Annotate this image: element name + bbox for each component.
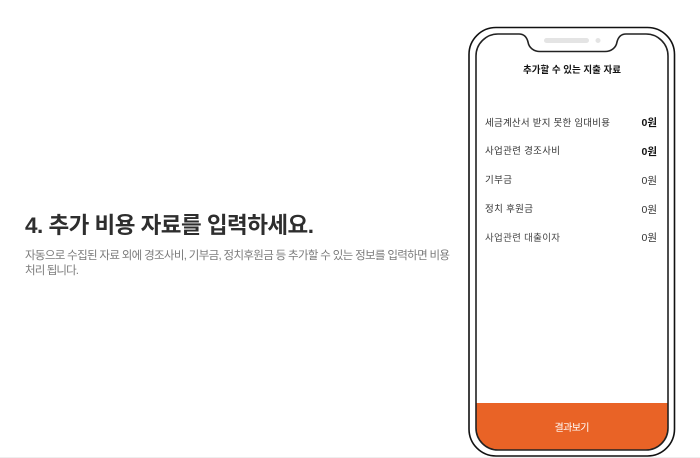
result button	[476, 403, 668, 450]
phone screen outline with notch	[476, 34, 668, 450]
expense row: rent: 0원	[642, 116, 657, 129]
phone mockup	[469, 28, 674, 456]
expense row: political: 0원	[642, 204, 657, 216]
description text: 자동으로 수집된 자료 외에 경조사비, 기부금, 정치후원금 등 추가할 수 있는 정보를 입력하면 비용	[25, 248, 450, 262]
result button: 결과보기	[554, 422, 590, 434]
expense row: donations	[485, 175, 657, 187]
camera	[596, 38, 600, 43]
expense row: congratulations: 0원	[642, 145, 657, 158]
expense row: rent: 세금계산서 받지 못한 임대비용	[485, 117, 610, 129]
description text: 처리 됩니다.	[25, 264, 79, 277]
phone body	[469, 28, 674, 456]
description text	[25, 248, 450, 277]
expense row: political	[485, 203, 657, 216]
expense row: donations: 기부금	[485, 175, 512, 186]
screen title: 추가할 수 있는 지출 자료	[523, 64, 621, 76]
expense row: loan interest: 0원	[642, 232, 657, 244]
heading: 4. 추가 비용 자료를 입력하세요.	[25, 213, 314, 238]
expense row: donations: 0원	[642, 175, 657, 187]
expense row: loan interest	[485, 232, 657, 244]
expense row: congratulations: 사업관련 경조사비	[485, 145, 560, 157]
expense row: loan interest: 사업관련 대출이자	[485, 232, 560, 244]
expense row: rent	[485, 116, 657, 129]
speaker	[544, 38, 589, 43]
expense row: political: 정치 후원금	[485, 203, 533, 215]
expense row: congratulations	[485, 145, 657, 158]
